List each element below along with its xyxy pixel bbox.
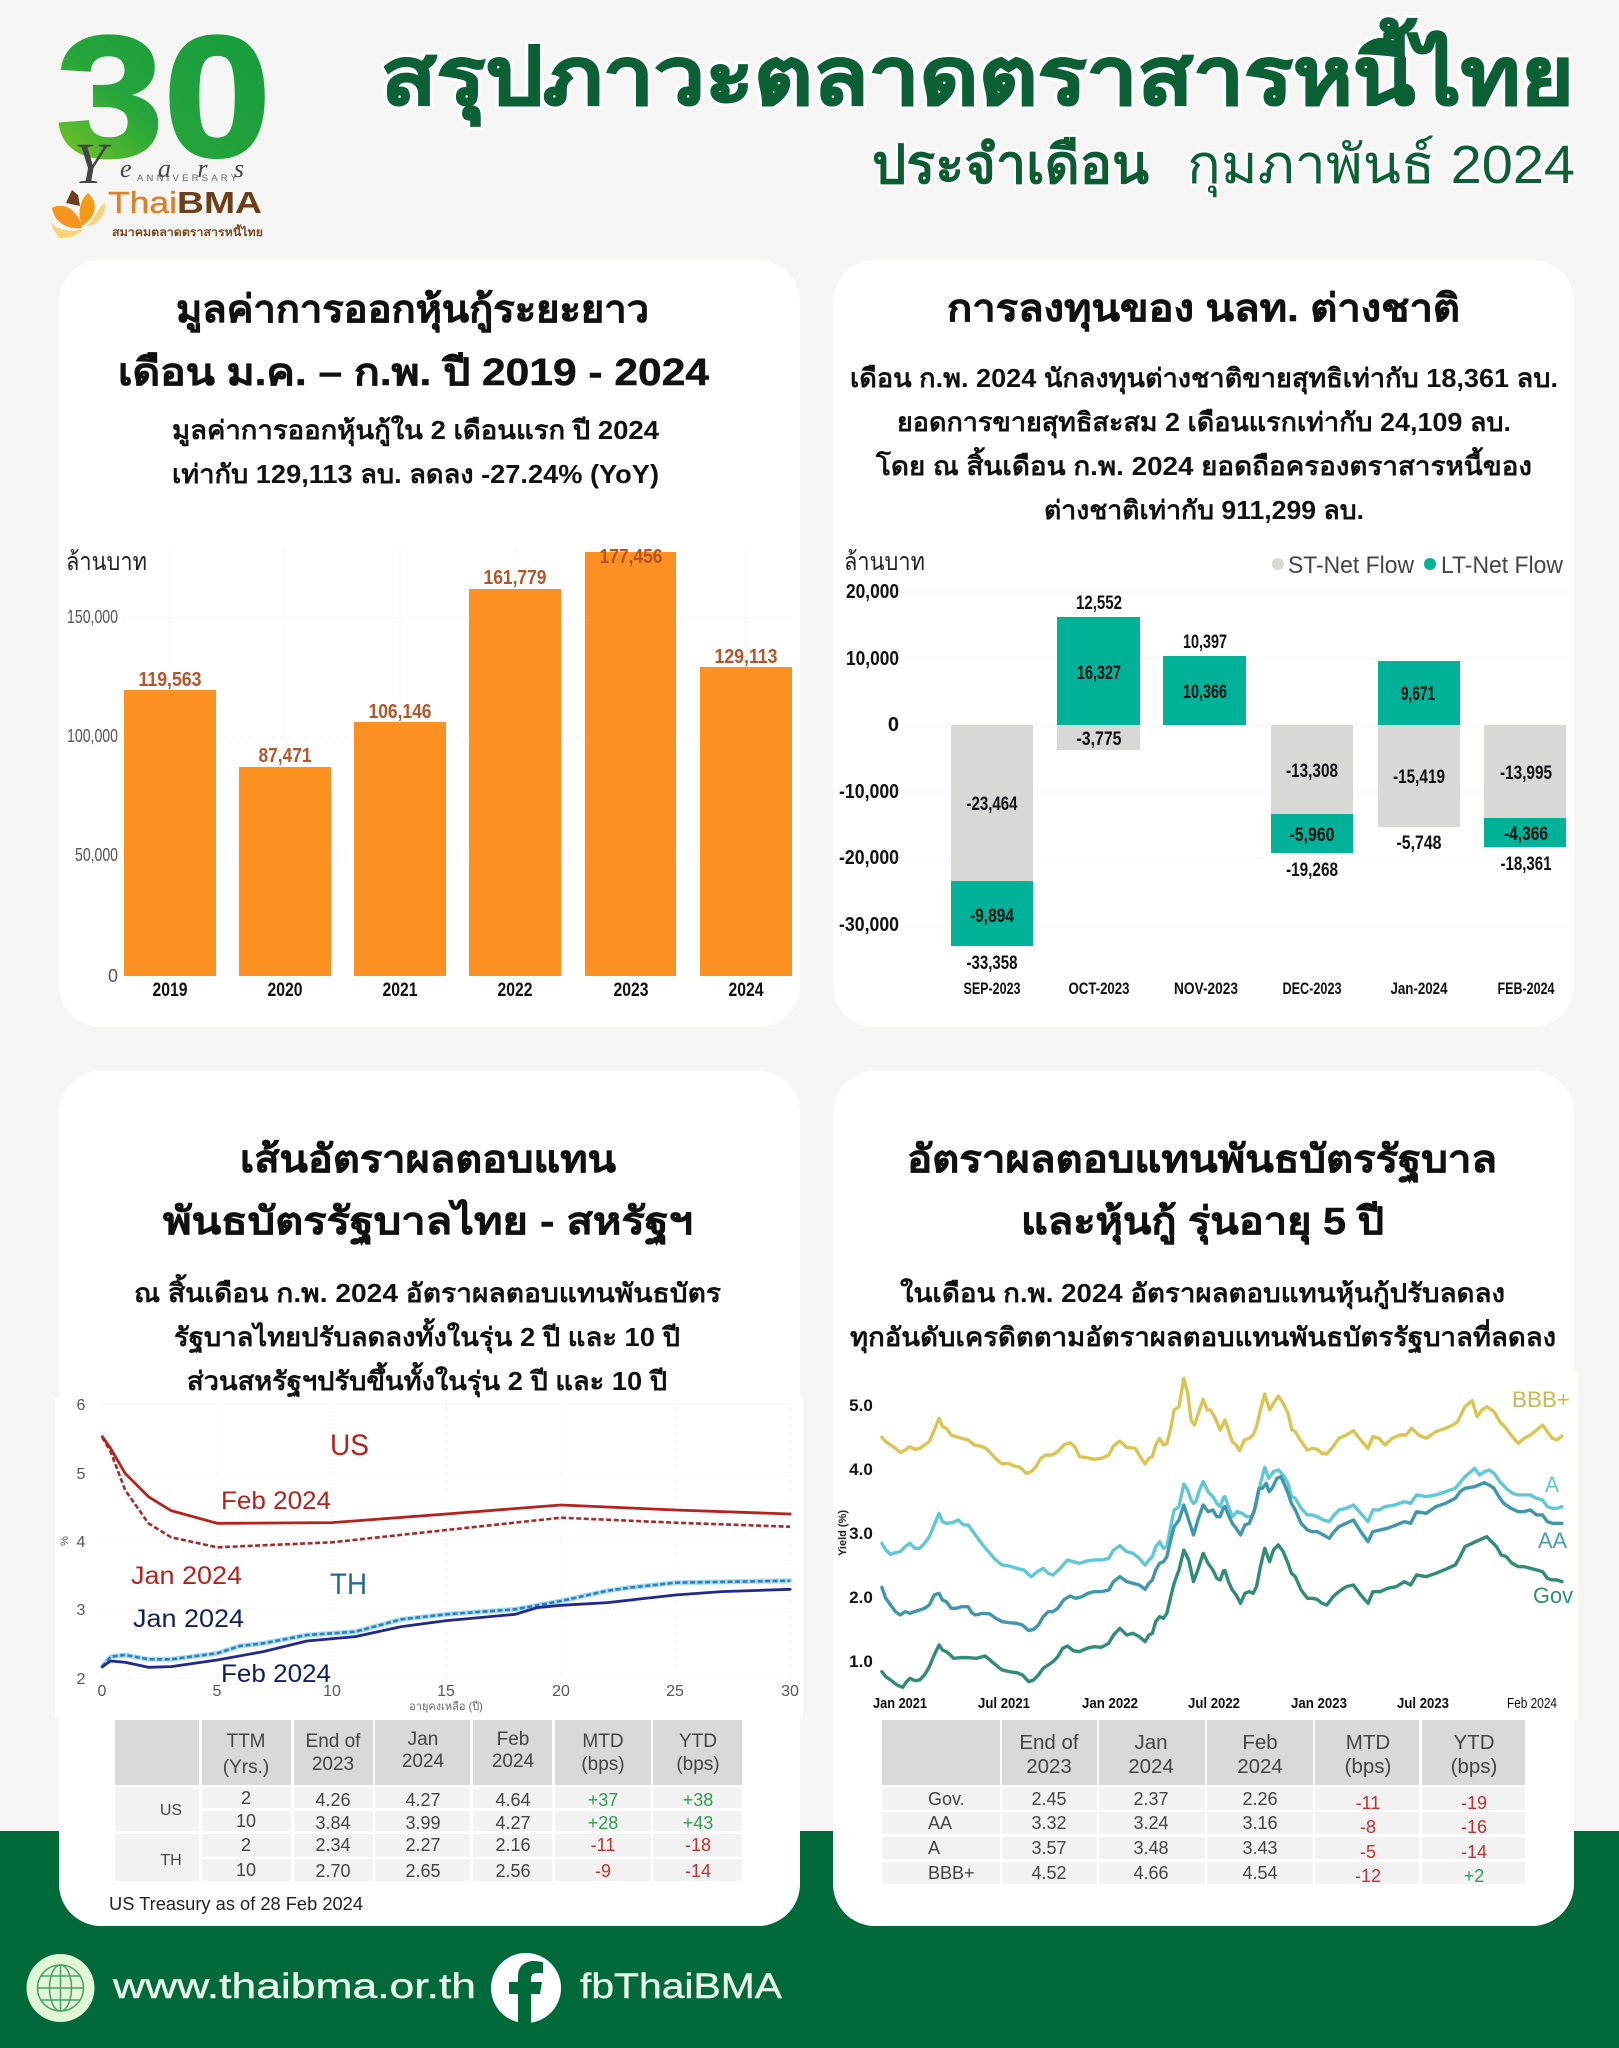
table: government yields: -18 xyxy=(685,1835,711,1855)
text block: รัฐบาลไทยปรับลดลงทั้งในรุ่น 2 ปี และ 10 ปี xyxy=(174,1317,680,1355)
bar: 2024: 129,113 xyxy=(714,646,778,668)
line chart: 5-year yields: Jan 2023 xyxy=(1291,1695,1347,1712)
stacked bar chart: net flow: -10,000 xyxy=(839,781,899,803)
bar chart: issuance by year: 50,000 xyxy=(75,845,118,865)
line chart: yield curves: 5 xyxy=(77,1466,86,1483)
table: government yields: 2024 xyxy=(402,1751,445,1772)
line chart: yield curves: 4 xyxy=(77,1534,86,1551)
bar: 2020: 87,471 xyxy=(258,745,312,767)
heading: มูลค่าการออกหุ้นกู้ระยะยาว xyxy=(176,289,649,333)
table: government yields: Feb xyxy=(497,1729,529,1750)
bars: NOV-2023: NOV-2023 xyxy=(1174,979,1238,998)
text block: ณ สิ้นเดือน ก.พ. 2024 อัตราผลตอบแทนพันธบัตร xyxy=(134,1273,721,1308)
bars: OCT-2023: -3,775 xyxy=(1076,729,1122,750)
bars: NOV-2023: 10,366 xyxy=(1183,682,1227,703)
website: www.thaibma.or.th xyxy=(112,1967,476,2006)
bar: 2022: 161,779 xyxy=(484,567,546,589)
line chart: 5-year yields: 2.0 xyxy=(849,1588,873,1607)
panel: bond issuance value xyxy=(59,260,800,1027)
bar chart: issuance by year: 100,000 xyxy=(67,726,118,746)
bars: Jan-2024 xyxy=(1378,661,1460,998)
text block: ต่างชาติเท่ากับ 911,299 ลบ. xyxy=(1044,495,1364,525)
bars: OCT-2023 xyxy=(1057,593,1140,998)
bar: 2021: 2021 xyxy=(382,980,418,1001)
heading: เดือน ม.ค. – ก.พ. ปี 2019 - 2024 xyxy=(118,352,709,394)
table: government yields: 3.84 xyxy=(315,1813,351,1833)
logo: ThaiBMA 30 years: ears xyxy=(120,154,244,183)
line chart: yield curves: อายุคงเหลือ (ปี) xyxy=(409,1700,483,1713)
table: government yields: YTD xyxy=(679,1731,717,1752)
bars: FEB-2024: -13,995 xyxy=(1500,763,1552,784)
table: corporate yields: 2023 xyxy=(1026,1755,1072,1778)
text block: เท่ากับ 129,113 ลบ. ลดลง -27.24% (YoY) xyxy=(172,459,659,489)
logo: ThaiBMA 30 years xyxy=(50,1,271,239)
stacked bar chart: net flow: 0 xyxy=(888,714,899,736)
bars: FEB-2024 xyxy=(1484,725,1566,998)
table: government yields: TH xyxy=(160,1852,182,1869)
bars: OCT-2023: 12,552 xyxy=(1076,593,1122,614)
table: corporate yields: 3.43 xyxy=(1242,1838,1278,1858)
bars: Jan-2024: Jan-2024 xyxy=(1390,979,1448,998)
line: US Feb 2024 xyxy=(102,1437,790,1523)
text block: ส่วนสหรัฐฯปรับขึ้นทั้งในรุ่น 2 ปี และ 10 ปี xyxy=(187,1361,667,1399)
line label: A: A xyxy=(1545,1472,1559,1497)
line chart: 5-year yields: 1.0 xyxy=(849,1652,873,1671)
bar: 2019: 2019 xyxy=(152,980,188,1001)
line chart: yield curves: 0 xyxy=(98,1683,107,1700)
logo: ThaiBMA 30 years: 30 xyxy=(56,1,271,193)
title: สรุปภาวะตลาดตราสารหนี้ไทย xyxy=(381,18,1574,127)
table: corporate yields: 2.45 xyxy=(1031,1789,1067,1809)
table: corporate yields: 4.66 xyxy=(1133,1863,1169,1883)
bars: OCT-2023: OCT-2023 xyxy=(1068,979,1130,998)
subtitle: ประจำเดือน xyxy=(872,135,1149,195)
table: corporate yields: A xyxy=(928,1838,940,1858)
line chart: 5-year yields: 5.0 xyxy=(849,1396,873,1415)
line: BBB+ xyxy=(882,1378,1562,1473)
line chart: yield curves: 3 xyxy=(77,1602,86,1619)
table: corporate yields: 2024 xyxy=(1128,1755,1174,1778)
table: corporate yields: +2 xyxy=(1464,1866,1484,1886)
table: government yields: -11 xyxy=(591,1835,615,1855)
bars: Jan-2024: -5,748 xyxy=(1396,833,1442,854)
bar chart: issuance by year: ล้านบาท xyxy=(66,548,147,576)
line chart: 5-year yields: Jan 2022 xyxy=(1082,1695,1138,1712)
table: corporate yields: 3.24 xyxy=(1133,1813,1169,1833)
table: government yields: 2.65 xyxy=(405,1861,441,1881)
table: corporate yields: 2024 xyxy=(1237,1755,1283,1778)
bar: 2020: 2020 xyxy=(268,980,302,1001)
bar: 2019: 119,563 xyxy=(138,669,202,691)
bar: 2023 xyxy=(585,546,676,1001)
table: corporate yields: YTD xyxy=(1454,1731,1494,1754)
table: government yields: US xyxy=(160,1802,182,1819)
heading xyxy=(907,1139,1497,1245)
table: government yields: +28 xyxy=(588,1813,618,1833)
table: corporate yields: 3.57 xyxy=(1031,1838,1067,1858)
text block: เดือน ก.พ. 2024 นักลงทุนต่างชาติขายสุทธิเท่ากับ 18,361 ลบ. xyxy=(850,363,1558,395)
table: government yields: 2023 xyxy=(312,1754,354,1775)
facebook page name: fbThaiBMA xyxy=(580,1967,783,2006)
table: government yields: MTD xyxy=(582,1731,624,1752)
line: AA xyxy=(882,1477,1562,1631)
line label: Gov: Gov xyxy=(1533,1583,1573,1608)
table: government yields: +38 xyxy=(683,1790,713,1810)
table: government yields: 2.56 xyxy=(495,1861,531,1881)
heading: และหุ้นกู้ รุ่นอายุ 5 ปี xyxy=(1021,1201,1384,1245)
line label: US: US xyxy=(330,1429,369,1462)
table: corporate yields xyxy=(882,1720,1525,1886)
bars: NOV-2023 xyxy=(1163,632,1246,998)
logo: ThaiBMA 30 years: Y xyxy=(74,131,112,196)
bars: FEB-2024: -4,366 xyxy=(1504,824,1548,845)
bars: SEP-2023 xyxy=(951,725,1033,998)
line chart: yield curves: 25 xyxy=(666,1683,684,1700)
table: corporate yields: 3.48 xyxy=(1133,1838,1169,1858)
stacked bar chart: net flow: 10,000 xyxy=(846,648,899,670)
line chart: 5-year yields: Jan 2021 xyxy=(873,1695,927,1712)
table: government yields: +37 xyxy=(588,1790,618,1810)
bars: OCT-2023: 16,327 xyxy=(1077,663,1121,684)
bar: 2021: 106,146 xyxy=(368,701,432,723)
text block: ในเดือน ก.พ. 2024 อัตราผลตอบแทนหุ้นกู้ปรับลดลง xyxy=(900,1278,1505,1310)
table: government yields: 2.27 xyxy=(405,1835,441,1855)
bar chart: issuance by year xyxy=(66,546,792,1001)
heading xyxy=(163,1139,693,1246)
table: corporate yields: AA xyxy=(928,1813,952,1833)
table: corporate yields: -11 xyxy=(1356,1793,1380,1813)
table: government yields: 10 xyxy=(236,1860,256,1880)
table: government yields: 2024 xyxy=(492,1751,535,1772)
heading: อัตราผลตอบแทนพันธบัตรรัฐบาล xyxy=(907,1139,1497,1184)
table: corporate yields: 4.52 xyxy=(1031,1863,1067,1883)
table: government yields xyxy=(115,1720,742,1881)
line label: TH Feb 2024: Feb 2024 xyxy=(221,1660,331,1688)
table: corporate yields: Gov. xyxy=(928,1789,965,1809)
table: corporate yields: Feb xyxy=(1242,1731,1278,1754)
bar: 2021 xyxy=(354,701,446,1001)
table: corporate yields: 2.37 xyxy=(1133,1789,1169,1809)
table: government yields: (Yrs.) xyxy=(223,1757,269,1778)
stacked bar chart: net flow: ล้านบาท xyxy=(844,548,925,576)
table: government yields: 4.64 xyxy=(495,1790,531,1810)
bars: Jan-2024: -15,419 xyxy=(1393,767,1445,788)
line chart: yield curves: 30 xyxy=(781,1683,799,1700)
line: Gov xyxy=(882,1537,1562,1687)
table: government yields: -14 xyxy=(685,1861,711,1881)
table: government yields: 10 xyxy=(236,1811,256,1831)
table: government yields: TTM xyxy=(226,1731,266,1752)
panel: 5-year yields xyxy=(833,1071,1578,1926)
table: corporate yields: 2.26 xyxy=(1242,1789,1278,1809)
line chart: yield curves: 5 xyxy=(213,1683,222,1700)
line label: BBB+: BBB+ xyxy=(1512,1387,1570,1412)
table: government yields: (bps) xyxy=(581,1754,625,1775)
bar: 2022: 2022 xyxy=(498,980,532,1001)
line chart: yield curves: 2 xyxy=(77,1671,86,1688)
bars: NOV-2023: 10,397 xyxy=(1183,632,1227,653)
table: government yields: 3.99 xyxy=(405,1813,441,1833)
heading: การลงทุนของ นลท. ต่างชาติ xyxy=(947,288,1460,332)
table: corporate yields: Jan xyxy=(1134,1731,1168,1754)
stacked bar chart: net flow: -20,000 xyxy=(839,847,899,869)
stacked bar chart: net flow xyxy=(839,548,1567,998)
text block: โดย ณ สิ้นเดือน ก.พ. 2024 ยอดถือครองตราสารหนี้ของ xyxy=(875,446,1532,481)
bar chart: issuance by year: 0 xyxy=(108,966,118,986)
line chart: yield curves: 10 xyxy=(323,1683,341,1700)
legend: LT-Net Flow xyxy=(1441,552,1564,579)
table: government yields: (bps) xyxy=(676,1754,720,1775)
legend: ST-Net Flow xyxy=(1288,552,1415,579)
line label: US Feb 2024: Feb 2024 xyxy=(221,1487,331,1515)
bar chart: issuance by year: 150,000 xyxy=(67,607,118,627)
line label: US Jan 2024: Jan 2024 xyxy=(131,1562,242,1590)
table: government yields: 4.27 xyxy=(495,1813,531,1833)
icon: globe xyxy=(26,1954,94,2022)
text block xyxy=(134,1273,721,1399)
text block: ทุกอันดับเครดิตตามอัตราผลตอบแทนพันธบัตรรัฐบาลที่ลดลง xyxy=(850,1318,1556,1355)
stacked bar chart: net flow: -30,000 xyxy=(839,914,899,936)
bar: 2020 xyxy=(239,745,331,1001)
bars: SEP-2023: -23,464 xyxy=(966,794,1018,815)
table: corporate yields: -8 xyxy=(1360,1817,1376,1837)
table: government yields: 2.70 xyxy=(315,1861,351,1881)
line: A xyxy=(882,1467,1562,1577)
table: corporate yields: (bps) xyxy=(1345,1755,1391,1778)
bar: 2024 xyxy=(700,646,792,1001)
bars: Jan-2024: 9,671 xyxy=(1401,684,1435,705)
line chart: 5-year yields: 3.0 xyxy=(849,1524,873,1543)
table: corporate yields: End of xyxy=(1019,1731,1079,1754)
legend xyxy=(1272,552,1564,579)
text block: ยอดการขายสุทธิสะสม 2 เดือนแรกเท่ากับ 24,109 ลบ. xyxy=(897,407,1511,439)
heading: เส้นอัตราผลตอบแทน xyxy=(240,1139,616,1181)
line chart: 5-year yields: Jul 2023 xyxy=(1397,1695,1449,1712)
table: corporate yields: -19 xyxy=(1461,1793,1487,1813)
line label: AA: AA xyxy=(1538,1528,1567,1553)
line chart: 5-year yields: Feb 2024 xyxy=(1507,1695,1557,1712)
table: corporate yields: -12 xyxy=(1355,1866,1381,1886)
logo: ThaiBMA 30 years: สมาคมตลาดตราสารหนี้ไทย xyxy=(112,224,263,239)
line: US Jan 2024 xyxy=(102,1437,790,1547)
icon: lotus xyxy=(50,190,105,238)
line chart: yield curves: 20 xyxy=(552,1683,570,1700)
table: government yields: 2.16 xyxy=(495,1835,531,1855)
bar: 2019 xyxy=(124,669,216,1001)
line chart: 5-year yields: Yield (%) xyxy=(837,1510,849,1556)
bars: FEB-2024: FEB-2024 xyxy=(1498,979,1555,998)
line: TH Jan 2024 xyxy=(102,1581,790,1667)
table: government yields: 2.34 xyxy=(315,1835,351,1855)
source note: US Treasury as of 28 Feb 2024 xyxy=(109,1894,363,1914)
text block xyxy=(850,363,1558,525)
subtitle: กุมภาพันธ์ 2024 xyxy=(1187,135,1575,198)
bar: 2023: 177,456 xyxy=(600,546,662,568)
bar: 2024: 2024 xyxy=(728,980,764,1001)
stacked bar chart: net flow: 20,000 xyxy=(846,581,899,603)
table: government yields: 4.27 xyxy=(405,1790,441,1810)
table: corporate yields: -14 xyxy=(1461,1842,1487,1862)
footer: contact links xyxy=(26,1953,783,2023)
table: corporate yields: 3.16 xyxy=(1242,1813,1278,1833)
bars: DEC-2023: DEC-2023 xyxy=(1282,979,1342,998)
table: corporate yields: BBB+ xyxy=(928,1863,975,1883)
text block: มูลค่าการออกหุ้นกู้ใน 2 เดือนแรก ปี 2024 xyxy=(172,415,660,447)
icon: facebook xyxy=(491,1953,561,2023)
bars: DEC-2023: -13,308 xyxy=(1286,761,1338,782)
table: corporate yields: MTD xyxy=(1346,1731,1390,1754)
line label: TH: TH xyxy=(330,1568,367,1601)
bars: SEP-2023: SEP-2023 xyxy=(964,979,1020,998)
table: government yields: 2 xyxy=(241,1835,251,1855)
line chart: yield curves xyxy=(55,1397,803,1718)
table: corporate yields: (bps) xyxy=(1451,1755,1497,1778)
bars: FEB-2024: -18,361 xyxy=(1500,854,1552,875)
line label: TH Jan 2024: Jan 2024 xyxy=(133,1605,244,1633)
footer band xyxy=(0,1831,1619,2048)
line chart: 5-year yields: Jul 2021 xyxy=(978,1695,1030,1712)
table: corporate yields: 4.54 xyxy=(1242,1863,1278,1883)
title: สรุปภาวะตลาดตราสารหนี้ไทย xyxy=(381,18,1574,127)
panel: foreign investors xyxy=(833,260,1574,1027)
bars: SEP-2023: -9,894 xyxy=(970,906,1014,927)
panel: yield curves TH-US xyxy=(55,1071,803,1926)
line: TH Feb 2024 xyxy=(102,1589,790,1667)
table: government yields: +43 xyxy=(683,1813,713,1833)
bar: 2022 xyxy=(469,567,561,1001)
table: corporate yields: -16 xyxy=(1461,1817,1487,1837)
line chart: 5-year yields: Jul 2022 xyxy=(1188,1695,1240,1712)
line chart: yield curves: % xyxy=(59,1536,71,1546)
bars: SEP-2023: -33,358 xyxy=(966,953,1018,974)
text block xyxy=(172,415,660,489)
table: government yields: 4.26 xyxy=(315,1790,351,1810)
line chart: yield curves: 15 xyxy=(437,1683,455,1700)
subtitle xyxy=(872,135,1575,198)
bars: DEC-2023: -5,960 xyxy=(1290,825,1334,846)
logo: ThaiBMA 30 years: Thai xyxy=(108,185,177,220)
line chart: yield curves: 6 xyxy=(77,1397,86,1414)
logo: ThaiBMA 30 years: ANNIVERSARY xyxy=(137,173,238,184)
table: government yields: Jan xyxy=(408,1729,438,1750)
line chart: 5-year yields xyxy=(837,1370,1578,1720)
logo: ThaiBMA 30 years: BMA xyxy=(177,185,262,220)
table: government yields: 2 xyxy=(241,1788,251,1808)
table: government yields: End of xyxy=(306,1731,361,1752)
heading xyxy=(118,289,709,394)
table: government yields: -9 xyxy=(595,1861,611,1881)
table: corporate yields: -5 xyxy=(1360,1842,1376,1862)
text block xyxy=(850,1278,1556,1355)
table: corporate yields: 3.32 xyxy=(1031,1813,1067,1833)
bars: DEC-2023: -19,268 xyxy=(1286,860,1338,881)
bar: 2023: 2023 xyxy=(614,980,648,1001)
line chart: 5-year yields: 4.0 xyxy=(849,1460,873,1479)
heading: พันธบัตรรัฐบาลไทย - สหรัฐฯ xyxy=(163,1199,693,1246)
bars: DEC-2023 xyxy=(1271,725,1353,998)
